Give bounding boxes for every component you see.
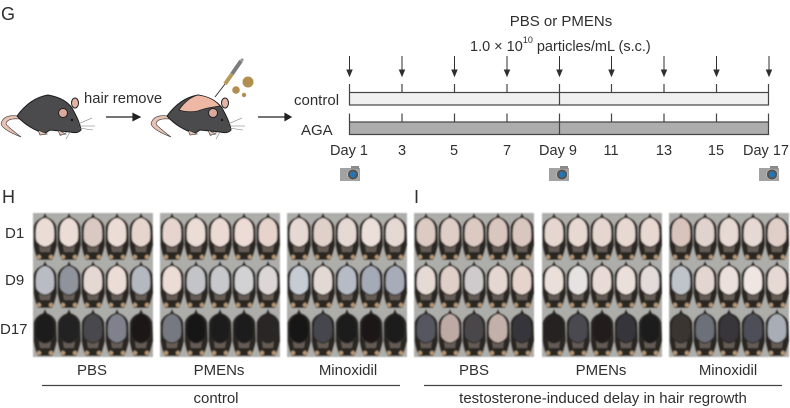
control timeline bar [350,84,768,105]
photo panel: testosterone PBS [414,213,534,357]
bracket line: control [42,384,400,386]
AGA timeline bar [350,114,768,134]
photo panel: testosterone Minoxidil [669,213,789,357]
hair remove label: hair remove [84,91,162,107]
icons: cameras [340,166,779,181]
group labels: Minoxidil [319,362,377,379]
control label: control [294,92,339,109]
day labels: Day 9 [539,143,577,159]
AGA label: AGA [301,122,333,139]
row labels: D9 [5,272,24,289]
day labels: Day 17 [743,143,789,159]
dose text: 1.0 × 10 [470,39,523,55]
day labels: 7 [503,143,511,159]
photo panel: control Minoxidil [287,213,407,357]
photo panel: control PBS [33,213,153,357]
row labels: D17 [0,321,28,338]
group labels: Minoxidil [699,362,757,379]
dose text: particles/mL (s.c.) [533,39,651,55]
day labels: 15 [708,143,724,159]
photo panel: control PMENs [160,213,280,357]
day labels: 3 [398,143,406,159]
group labels: PMENs [194,362,244,379]
row labels: D1 [5,225,24,242]
day labels [330,143,789,159]
icon: black mouse before hair removal [1,95,95,139]
row labels [0,225,28,338]
day labels: Day 1 [330,143,368,159]
group labels [77,362,757,379]
group labels: PMENs [576,362,626,379]
bracket line: testosterone [424,384,782,386]
testosterone group label: testosterone-induced delay in hair regrowth [459,390,747,407]
day labels: 13 [656,143,672,159]
control group label: control [193,390,239,407]
arrow: to timeline [258,114,291,120]
photo panel: testosterone PMENs [542,213,662,357]
day labels: 5 [450,143,458,159]
panel label H: H [2,187,15,207]
panel label I: I [414,187,419,207]
group labels: PBS [77,362,107,379]
panel label G: G [1,4,15,24]
day labels: 11 [603,143,619,159]
dosing heading: PBS or PMENs [510,13,612,30]
icon: mouse with shaved back and syringe [151,59,254,139]
injection arrows [347,56,772,76]
group labels: PBS [459,362,489,379]
arrow: hair remove [106,114,140,120]
dose text: 10 [523,35,533,45]
